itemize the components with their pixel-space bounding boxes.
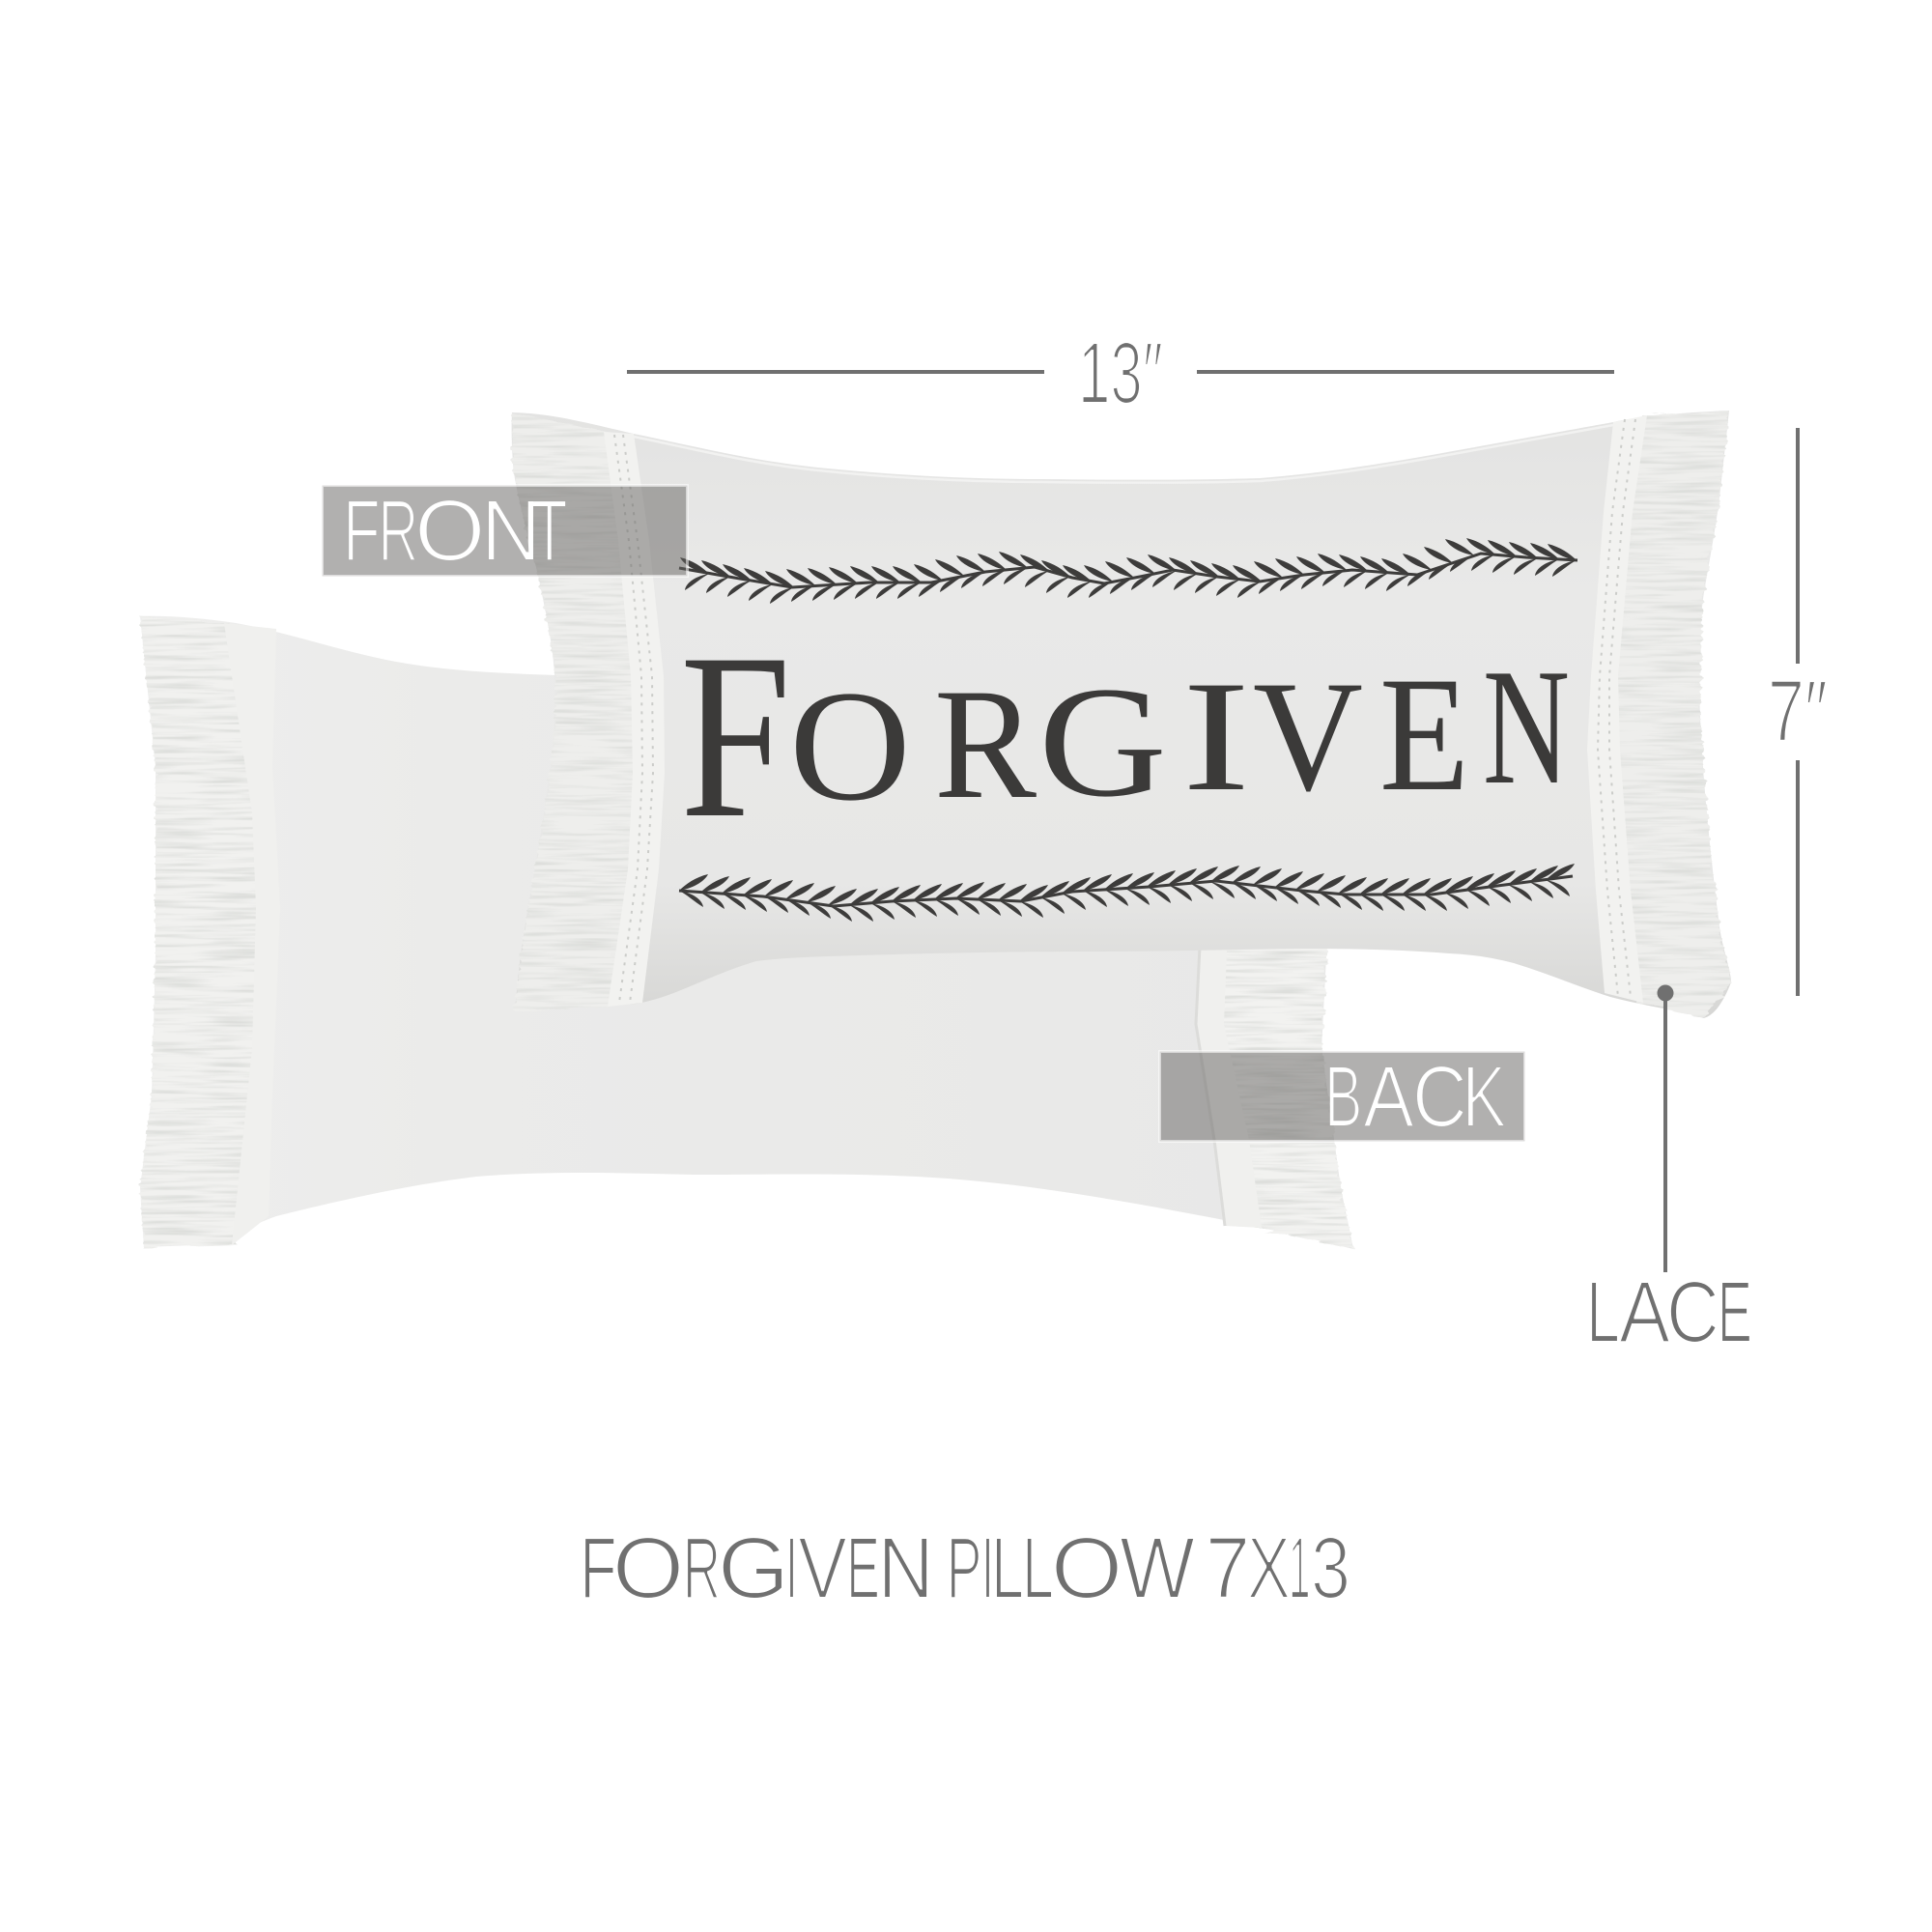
title caption: X	[1247, 1520, 1291, 1617]
title caption: I	[784, 1520, 798, 1617]
back seam shadow	[1196, 927, 1225, 1226]
front pillow body	[512, 411, 1731, 1018]
back pillow	[140, 616, 1353, 1249]
dimension: width 13 inches: 13″	[1078, 326, 1163, 422]
dimension: width 13 inches	[627, 326, 1614, 422]
word FORGIVEN: V	[1253, 649, 1363, 824]
label: BACK: K	[1463, 1049, 1507, 1146]
front pillow right lace	[1587, 415, 1647, 1003]
label: FRONT: R	[378, 483, 418, 580]
title caption: L	[1022, 1520, 1054, 1617]
word FORGIVEN: G	[1038, 655, 1167, 830]
callout: lace pointer: A	[1619, 1264, 1670, 1361]
title caption: I	[981, 1520, 995, 1617]
title caption: N	[878, 1520, 934, 1617]
word FORGIVEN: F	[680, 605, 791, 867]
front top seam	[634, 425, 1613, 483]
back pillow right seam band	[1196, 927, 1262, 1228]
word FORGIVEN: O	[789, 659, 911, 834]
label: BACK: A	[1363, 1049, 1414, 1146]
word FORGIVEN: E	[1379, 643, 1469, 825]
front pillow left lace	[604, 432, 665, 1007]
front pillow right fringe	[1613, 411, 1731, 1018]
front pillow left fringe	[512, 412, 638, 1010]
label: BACK	[1159, 1049, 1524, 1146]
label: FRONT: T	[531, 483, 568, 580]
title caption: W	[1120, 1520, 1195, 1617]
title caption: O	[612, 1520, 684, 1617]
label: BACK: B	[1324, 1049, 1362, 1146]
label: FRONT: N	[481, 483, 541, 580]
word FORGIVEN: N	[1483, 636, 1570, 819]
title caption: R	[683, 1520, 721, 1617]
bottom vine decoration	[679, 864, 1575, 922]
back pillow left seam band	[224, 623, 280, 1245]
dimension: height 7 inches	[1768, 428, 1828, 996]
label: BACK: C	[1412, 1049, 1467, 1146]
callout: lace pointer: C	[1666, 1264, 1719, 1361]
lace stitching left	[614, 435, 653, 1003]
title caption: V	[798, 1520, 847, 1617]
top vine decoration	[679, 538, 1577, 604]
label: FRONT	[323, 483, 688, 580]
title caption: 7	[1206, 1520, 1250, 1617]
label: FRONT: F	[343, 483, 381, 580]
title caption: 1	[1289, 1520, 1311, 1617]
word FORGIVEN: R	[934, 657, 1037, 832]
back pillow left fringe	[140, 616, 260, 1247]
word FORGIVEN: I	[1182, 649, 1250, 824]
title caption: O	[1051, 1520, 1122, 1617]
back pillow right fringe	[1218, 869, 1353, 1249]
title caption: E	[846, 1520, 880, 1617]
title caption: F	[580, 1520, 617, 1617]
back pillow body	[140, 616, 1353, 1249]
label: FRONT: O	[414, 483, 485, 580]
title caption: L	[991, 1520, 1024, 1617]
lace stitching right	[1598, 419, 1635, 997]
title caption: 3	[1311, 1520, 1350, 1617]
dimension: height 7 inches: 7″	[1768, 664, 1828, 760]
callout: lace pointer: L	[1586, 1264, 1620, 1361]
title caption: G	[718, 1520, 789, 1617]
front pillow	[512, 411, 1731, 1018]
callout: lace pointer	[1586, 985, 1752, 1361]
title caption: P	[947, 1520, 982, 1617]
callout: lace pointer: E	[1718, 1264, 1752, 1361]
